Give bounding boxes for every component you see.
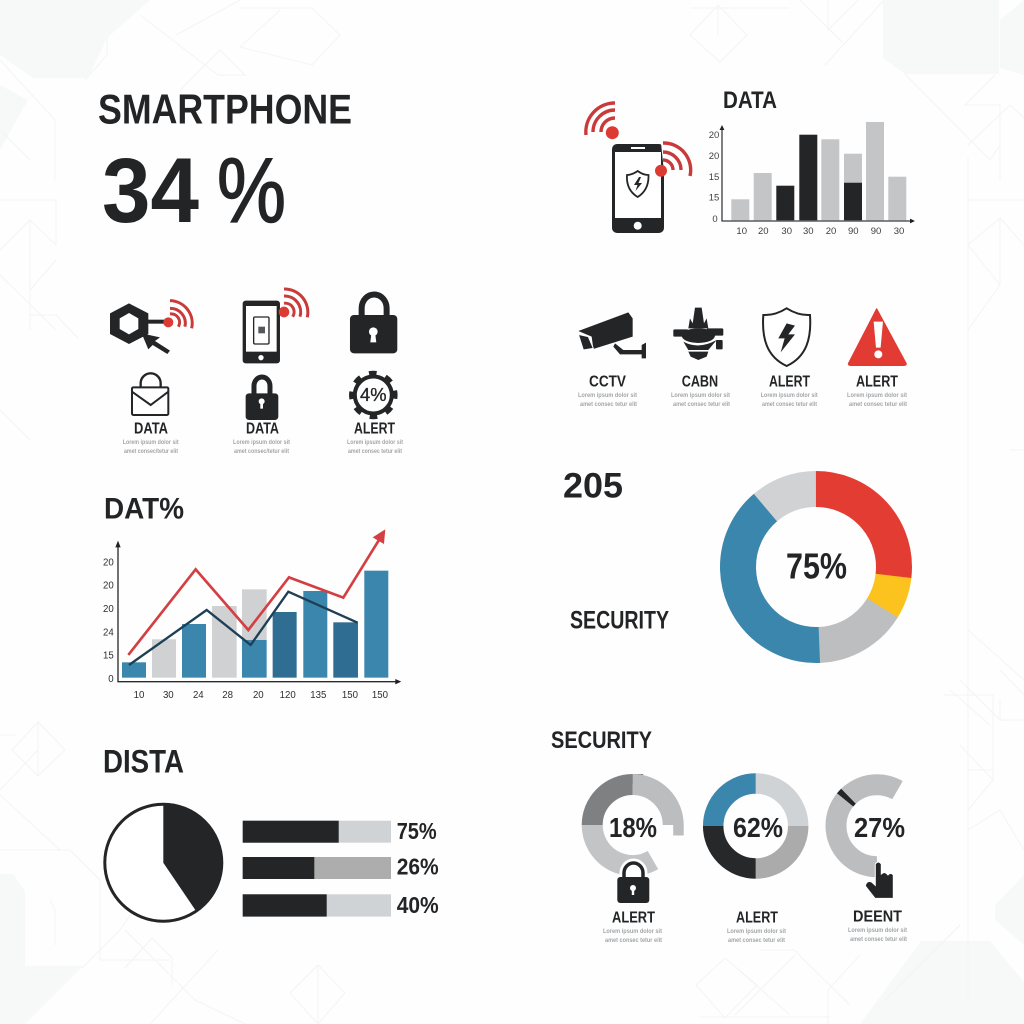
chart: bars with trend lines: 135 — [310, 690, 326, 701]
chart: bars with trend lines: 20 — [103, 581, 114, 592]
label: data and caption: Lorem ipsum dolor sit — [123, 439, 179, 446]
label: alert and caption: ALERT — [612, 910, 655, 926]
panel: combo bar and line chart — [103, 492, 401, 701]
label: data and caption — [233, 420, 291, 455]
bar chart: data: 30 — [781, 226, 792, 237]
bar chart: data: 10 — [736, 226, 747, 237]
label: alert and caption: amet consec tetur elit — [348, 448, 403, 455]
icon: phone with shield and wifi — [586, 103, 691, 233]
chart: progress bar 75 percent: 75% — [397, 818, 437, 844]
big number: 34 percent: 34 — [102, 140, 199, 242]
label: cabn and caption: CABN — [682, 374, 718, 390]
chart: donut 62 percent: 62% — [733, 812, 783, 843]
chart: bars with trend lines: 15 — [103, 651, 114, 662]
label: data and caption: Lorem ipsum dolor sit — [233, 439, 291, 446]
chart: bars with trend lines: 0 — [108, 674, 114, 685]
label: data and caption: amet consec/tetur elit — [234, 448, 290, 455]
chart: bars with trend lines: 150 — [342, 690, 358, 701]
label: alert and caption: amet consec tetur elit — [849, 401, 908, 408]
chart: donut 27 percent with hand: 27% — [854, 812, 905, 843]
label: alert and caption: amet consec tetur elit — [762, 401, 818, 408]
heading: dat percent: DAT% — [104, 492, 184, 526]
icon: red warning triangle — [849, 309, 906, 365]
label: cctv and caption — [578, 374, 638, 408]
chart: bars with trend lines: 20 — [253, 690, 264, 701]
label: alert and caption — [347, 420, 404, 455]
bar chart: data: 20 — [826, 226, 836, 237]
icon: padlock large — [350, 294, 397, 353]
icon: gear with 4 percent — [348, 370, 399, 420]
bar chart: data: 90 — [848, 226, 859, 237]
big number: 205: 205 — [563, 466, 623, 506]
panel: left icon grid — [110, 289, 404, 455]
chart: bars with trend lines: 30 — [163, 690, 174, 701]
icon: shield with lightning — [763, 308, 810, 366]
panel: security donut — [563, 457, 926, 677]
label: alert and caption: ALERT — [856, 374, 898, 390]
label: deent and caption — [848, 908, 908, 943]
chart: progress bar 75 percent — [243, 818, 437, 844]
big number: 34 percent: % — [217, 140, 286, 242]
chart: pie — [105, 803, 223, 921]
label: deent and caption: DEENT — [853, 908, 902, 926]
panel: smartphone headline — [98, 86, 352, 242]
heading: security: SECURITY — [551, 727, 652, 754]
icon: cctv camera — [578, 312, 646, 358]
label: alert and caption: Lorem ipsum dolor sit — [727, 928, 787, 935]
chart: progress bar 40 percent — [243, 892, 439, 918]
icon: envelope with lock shackle — [132, 373, 168, 415]
bar chart: data: 0 — [712, 214, 718, 225]
label: cabn and caption — [671, 374, 731, 408]
panel: distribution pie and bars — [103, 744, 439, 921]
panel: security small donuts — [551, 727, 935, 944]
label: alert and caption — [727, 910, 787, 944]
chart: donut 18 percent with lock: 18% — [609, 812, 657, 843]
bar chart: data: 15 — [709, 192, 719, 204]
heading: data: DATA — [723, 87, 777, 114]
chart: bars with trend lines: 20 — [103, 557, 114, 568]
icon: cabin mechanism — [673, 308, 723, 360]
chart: bars with trend lines: 24 — [103, 627, 114, 638]
chart: donut 62 percent — [713, 784, 798, 868]
chart: bars with trend lines: 20 — [103, 604, 114, 615]
label: alert and caption: ALERT — [769, 374, 810, 390]
heading: dista: DISTA — [103, 744, 184, 780]
bar chart: data — [709, 122, 915, 237]
chart: bars with trend lines: 150 — [372, 690, 388, 701]
chart: progress bar 26 percent — [243, 854, 439, 880]
chart: donut 27 percent with hand — [819, 768, 935, 898]
icon: gear with 4 percent: 4% — [360, 385, 386, 405]
bar chart: data: 15 — [709, 172, 719, 183]
label: deent and caption: Lorem ipsum dolor sit — [848, 927, 908, 934]
heading: security: SECURITY — [570, 606, 669, 634]
bar chart: data: 90 — [871, 226, 881, 237]
chart: bars with trend lines: 24 — [193, 690, 204, 701]
bar chart: data: 20 — [758, 226, 769, 237]
label: alert and caption: amet consec tetur elit — [728, 937, 786, 944]
label: data and caption: DATA — [134, 420, 168, 438]
label: alert and caption — [847, 374, 908, 408]
label: alert and caption: Lorem ipsum dolor sit — [761, 392, 818, 399]
chart: donut 18 percent with lock — [577, 770, 688, 903]
panel: right icon row — [578, 308, 908, 408]
chart: bars with trend lines — [103, 529, 401, 701]
icon: padlock small — [246, 377, 278, 420]
bar chart: data: 30 — [894, 226, 904, 237]
label: alert and caption: Lorem ipsum dolor sit — [847, 392, 908, 399]
icon: phone with signal — [243, 289, 308, 363]
icon: hex nut with cursor and signal — [110, 301, 192, 354]
label: alert and caption: ALERT — [354, 420, 395, 438]
label: deent and caption: amet consec tetur elit — [850, 936, 908, 943]
chart: bars with trend lines: 28 — [222, 690, 233, 701]
value: 75 percent: 75% — [786, 546, 847, 586]
chart: bars with trend lines: 120 — [280, 690, 296, 701]
label: cctv and caption: amet consec tetur elit — [580, 401, 638, 408]
label: data and caption — [123, 420, 179, 455]
heading: smartphone: SMARTPHONE — [98, 86, 352, 132]
label: cctv and caption: CCTV — [589, 374, 627, 390]
label: alert and caption: amet consec tetur elit — [605, 937, 663, 944]
bar chart: data: 20 — [709, 151, 719, 162]
chart: donut 75 percent — [706, 457, 926, 677]
label: cabn and caption: Lorem ipsum dolor sit — [671, 392, 731, 399]
big number: 34 percent — [102, 140, 286, 242]
label: data and caption: amet consec/tetur elit — [124, 448, 179, 455]
label: alert and caption — [761, 374, 818, 408]
label: cabn and caption: amet consec tetur elit — [673, 401, 731, 408]
label: cctv and caption: Lorem ipsum dolor sit — [578, 392, 638, 399]
label: data and caption: DATA — [246, 420, 279, 438]
chart: progress bar 40 percent: 40% — [397, 892, 439, 918]
label: alert and caption: ALERT — [736, 910, 778, 926]
label: alert and caption: Lorem ipsum dolor sit — [347, 439, 404, 446]
label: alert and caption: Lorem ipsum dolor sit — [603, 928, 663, 935]
chart: progress bar 26 percent: 26% — [397, 854, 439, 880]
label: alert and caption — [603, 910, 663, 944]
bar chart: data: 30 — [803, 226, 814, 237]
panel: phone with data bar chart — [586, 87, 915, 237]
chart: bars with trend lines: 10 — [134, 690, 144, 701]
bar chart: data: 20 — [709, 130, 719, 141]
